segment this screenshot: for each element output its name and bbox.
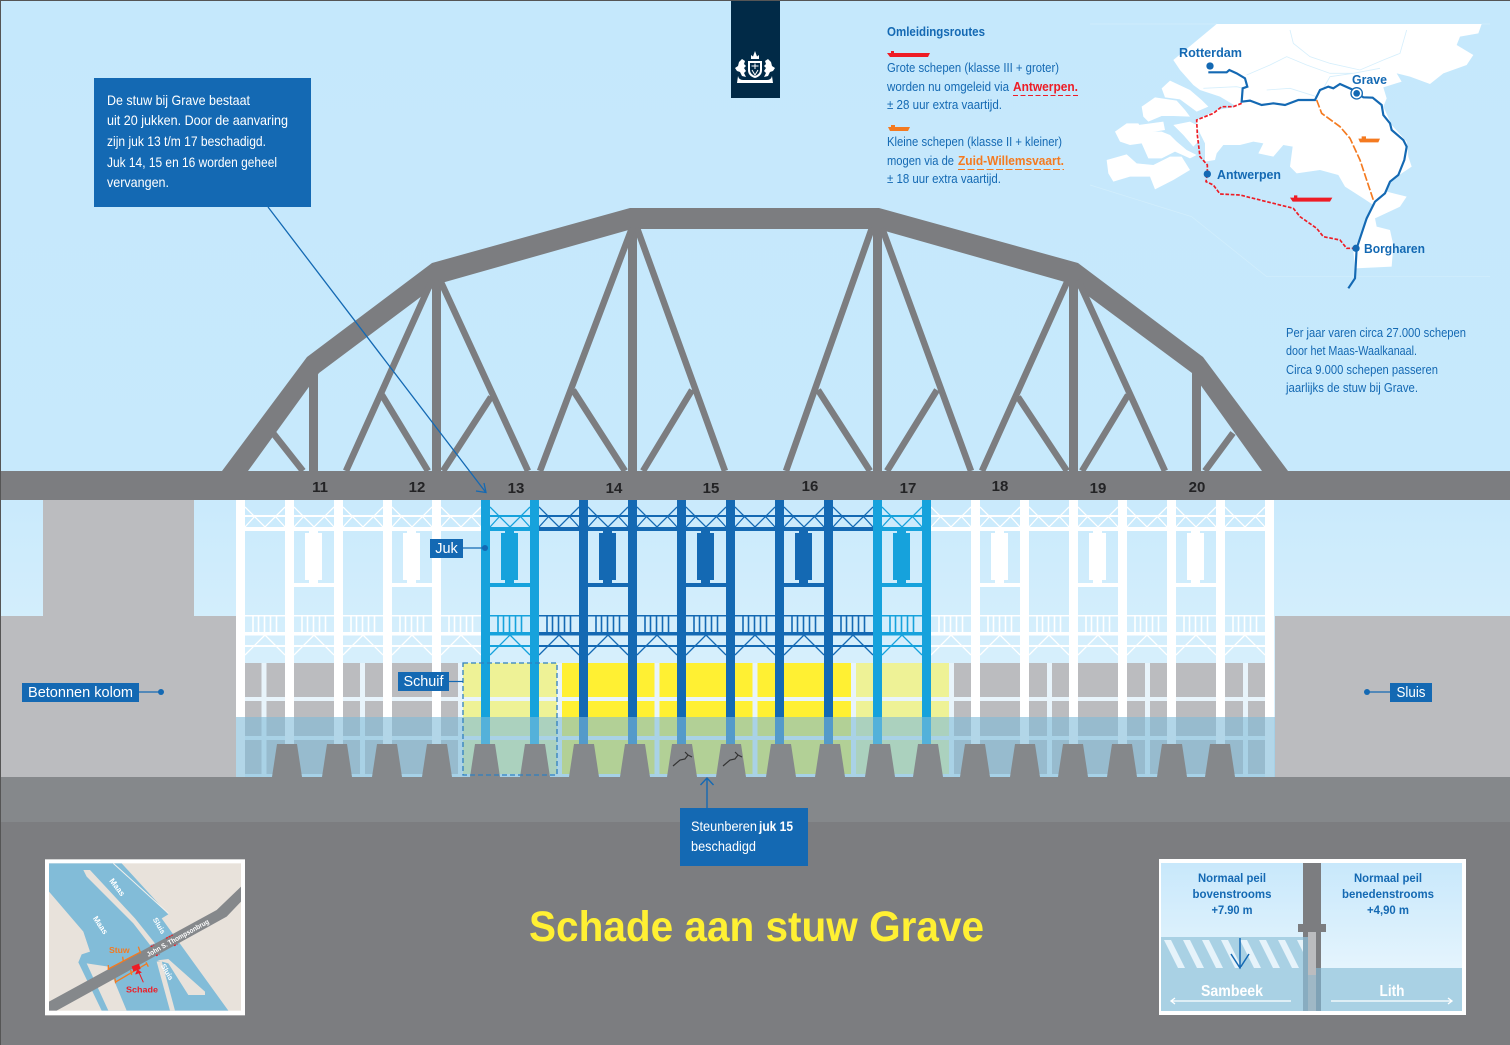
legend: omleidingsroutes: Grote schepen (klasse III + groter) bbox=[887, 60, 1059, 75]
column numbers: 16 bbox=[802, 478, 818, 495]
logo: Rijksoverheid crest bbox=[731, 0, 780, 98]
ground bbox=[0, 777, 1510, 822]
water bbox=[236, 717, 1275, 777]
legend: omleidingsroutes: mogen via de bbox=[887, 153, 954, 168]
legend: omleidingsroutes: Kleine schepen (klasse II + kleiner) bbox=[887, 134, 1062, 149]
map land bbox=[1107, 24, 1482, 268]
weir gates: schuiven bbox=[244, 663, 1265, 777]
column numbers: 18 bbox=[992, 478, 1008, 495]
title: Schade aan stuw Grave bbox=[529, 903, 984, 951]
legend: omleidingsroutes: Zuid-Willemsvaart. bbox=[958, 153, 1064, 168]
inset: water levels: Sambeek bbox=[1201, 983, 1263, 1000]
inset: location map: Maas bbox=[91, 914, 110, 936]
inset: location map: Sluis bbox=[159, 962, 175, 982]
column numbers: 11 bbox=[312, 479, 328, 496]
map labels: Grave bbox=[1352, 72, 1387, 87]
callout: stuw description bbox=[94, 78, 311, 207]
sluis concrete right bbox=[1275, 616, 1510, 777]
callout: steunberen juk 15: juk 15 bbox=[758, 818, 793, 834]
callout: stuw description: De stuw bij Grave bestaat bbox=[107, 92, 250, 108]
label: Schuif bbox=[398, 672, 463, 691]
inset: water levels: bovenstrooms bbox=[1192, 887, 1272, 901]
text: ship statistics: jaarlijks de stuw bij Grave. bbox=[1285, 380, 1418, 395]
column numbers: 20 bbox=[1189, 479, 1205, 496]
column numbers: 14 bbox=[606, 480, 623, 497]
column numbers: 19 bbox=[1090, 480, 1106, 497]
ship icon red bbox=[887, 51, 930, 57]
column numbers: 17 bbox=[900, 480, 916, 497]
map labels: Antwerpen bbox=[1217, 167, 1281, 182]
column numbers bbox=[312, 478, 1205, 497]
concrete column left bbox=[0, 500, 236, 777]
label: Betonnen kolom: Betonnen kolom bbox=[28, 685, 133, 701]
inset: water levels: benedenstrooms bbox=[1342, 887, 1434, 901]
legend: omleidingsroutes: Antwerpen. bbox=[1013, 79, 1078, 94]
text: ship statistics: Per jaar varen circa 27.000 schepen bbox=[1286, 325, 1466, 340]
dashed outline gate 13 bbox=[463, 663, 557, 775]
text: ship statistics: Circa 9.000 schepen passeren bbox=[1286, 362, 1438, 377]
piers: steunberen bbox=[272, 744, 1235, 777]
downstream water bbox=[1316, 968, 1462, 1011]
legend: omleidingsroutes: ± 28 uur extra vaartijd. bbox=[887, 97, 1002, 112]
route: orange dashed via Zuid-Willemsvaart bbox=[1317, 100, 1373, 200]
weir wall bbox=[1303, 863, 1321, 1011]
ship icon orange bbox=[888, 125, 910, 131]
callout: steunberen juk 15: Steunberen bbox=[691, 818, 757, 834]
callout: stuw description: uit 20 jukken. Door de aanvaring bbox=[107, 112, 288, 128]
inset damage marker bbox=[132, 964, 143, 982]
callout: stuw description: zijn juk 13 t/m 17 beschadigd. bbox=[107, 133, 266, 149]
cracks in piers bbox=[673, 752, 742, 766]
callout: stuw description: Juk 14, 15 en 16 worden geheel bbox=[107, 154, 277, 170]
inset: location map: Stuw bbox=[109, 946, 131, 955]
callout: stuw description: vervangen. bbox=[107, 174, 169, 190]
hatched lowered level bbox=[1164, 940, 1303, 968]
lower ground band bbox=[0, 822, 1510, 1045]
map labels bbox=[1179, 45, 1425, 256]
callout: steunberen juk 15: beschadigd bbox=[691, 838, 756, 854]
inset: water levels bbox=[1159, 859, 1466, 1015]
map: diversion routes bbox=[1090, 24, 1490, 288]
inset land bbox=[83, 870, 205, 1011]
inset: location map: Sluis bbox=[151, 916, 167, 936]
callout: steunberen juk 15 bbox=[680, 808, 808, 866]
inset: water levels: Lith bbox=[1380, 983, 1404, 1000]
label: Sluis bbox=[1364, 683, 1432, 702]
map labels: Rotterdam bbox=[1179, 45, 1242, 60]
legend heading: Omleidingsroutes bbox=[887, 25, 985, 39]
column numbers: 15 bbox=[703, 480, 719, 497]
label: Betonnen kolom bbox=[22, 683, 164, 702]
arrow: level drop bbox=[1231, 938, 1249, 968]
inset: location map: Maas bbox=[107, 877, 127, 898]
inset bridge bbox=[49, 887, 241, 1011]
legend: omleidingsroutes: worden nu omgeleid via bbox=[886, 79, 1010, 94]
inset stuw markers bbox=[108, 947, 148, 983]
arrow: callout to juk 13 bbox=[268, 207, 486, 492]
ship orange bbox=[1358, 136, 1380, 142]
map labels: Borgharen bbox=[1364, 241, 1425, 256]
inset water bbox=[49, 863, 228, 1011]
ship red bbox=[1290, 195, 1332, 202]
column numbers: 13 bbox=[508, 480, 524, 497]
inset: location map bbox=[45, 859, 245, 1015]
route: blue Maas river bbox=[1208, 70, 1407, 288]
arrow: steunberen bbox=[700, 778, 714, 808]
map dots bbox=[1204, 62, 1362, 252]
weir bays: bracing and railings bbox=[236, 507, 1265, 655]
weir columns: jukken bbox=[240, 500, 1270, 777]
damaged gates yellow bbox=[562, 663, 851, 774]
inset: location map: Schade bbox=[126, 984, 158, 994]
sky background bbox=[0, 0, 1510, 780]
legend: omleidingsroutes bbox=[886, 25, 1078, 186]
inset: water levels: +4,90 m bbox=[1367, 903, 1409, 917]
inset: water levels: Normaal peil bbox=[1354, 871, 1422, 885]
bridge deck bbox=[0, 471, 1510, 500]
text: ship statistics bbox=[1285, 325, 1466, 395]
inset: water levels: Normaal peil bbox=[1198, 871, 1266, 885]
route: red dashed via Antwerpen bbox=[1197, 103, 1355, 248]
text: ship statistics: door het Maas-Waalkanaal. bbox=[1286, 343, 1417, 358]
column numbers: 12 bbox=[409, 479, 425, 496]
upstream water bbox=[1161, 937, 1303, 1011]
legend: omleidingsroutes: ± 18 uur extra vaartijd. bbox=[887, 171, 1001, 186]
label: Schuif: Schuif bbox=[404, 674, 444, 690]
inset: water levels: +7.90 m bbox=[1212, 903, 1252, 917]
label: Sluis: Sluis bbox=[1396, 685, 1426, 701]
partly damaged gates pale yellow bbox=[463, 663, 557, 774]
label: Juk: Juk bbox=[435, 541, 459, 557]
bridge truss bbox=[222, 208, 1288, 471]
label: Juk bbox=[430, 539, 488, 558]
inset: location map: John S. Thompsonbrug bbox=[146, 919, 211, 959]
